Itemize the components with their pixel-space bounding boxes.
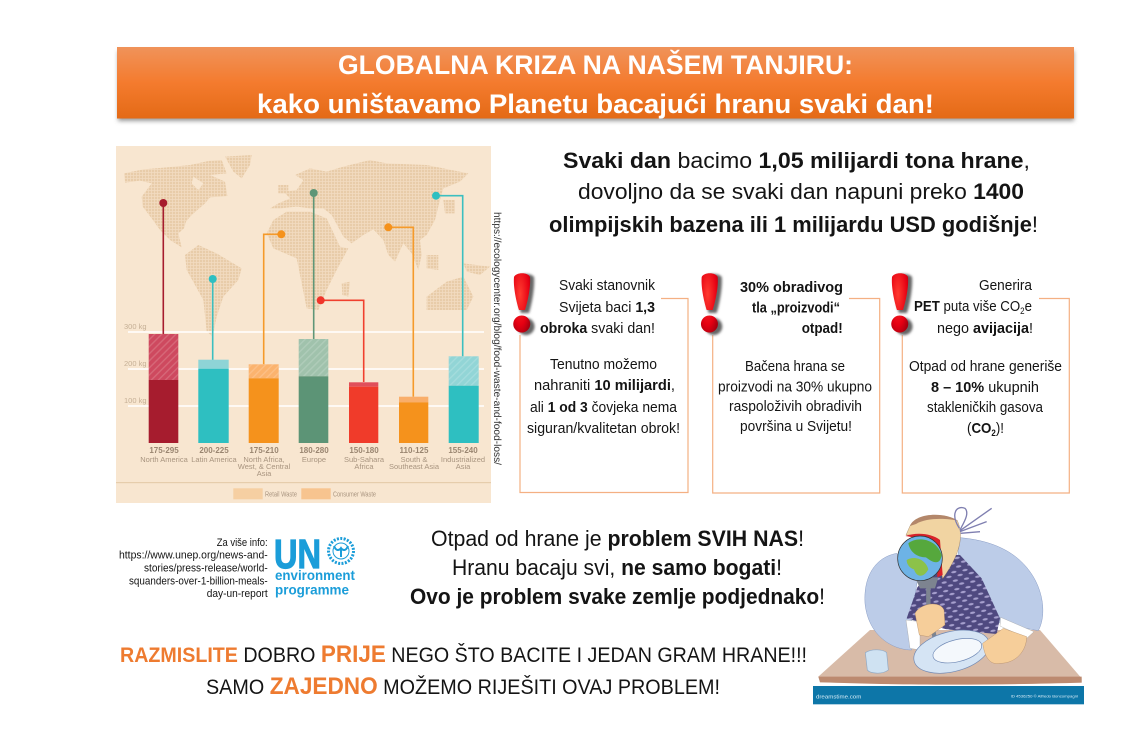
axis labels bbox=[124, 322, 147, 405]
card 2 body: proizvodi na 30% ukupno bbox=[718, 378, 872, 396]
bar category labels: 155-240 bbox=[448, 446, 478, 455]
call to action bbox=[120, 641, 807, 700]
bar category labels: Africa bbox=[354, 462, 374, 471]
more info text: Za više info: bbox=[217, 537, 268, 549]
head bbox=[905, 508, 992, 579]
chart legend: Consumer Waste bbox=[333, 490, 376, 498]
card 3 heading: nego avijacija! bbox=[937, 320, 1033, 337]
card 1 heading bbox=[540, 277, 655, 337]
icon: exclamation mark bbox=[701, 273, 722, 335]
card 2 heading: tla „proizvodi“ bbox=[752, 300, 840, 316]
hands, cuffs and plate bbox=[906, 604, 1034, 680]
bar category labels: 150-180 bbox=[349, 446, 379, 455]
card 3 body: stakleničkih gasova bbox=[927, 399, 1044, 416]
card 3 body: 8 – 10% ukupnih bbox=[931, 379, 1039, 396]
bar: Europe bbox=[299, 189, 328, 443]
UN environment programme logo bbox=[274, 531, 355, 598]
card 2 body: Bačena hrana se bbox=[745, 358, 845, 375]
source url, vertical: https://ecologycenter.org/blog/food-waste-and-food-loss/ bbox=[491, 212, 503, 465]
more info text: stories/press-release/world- bbox=[144, 562, 268, 574]
card 3 body: )! bbox=[996, 420, 1004, 437]
card 3 body: 2 bbox=[991, 428, 996, 438]
chart legend bbox=[116, 482, 491, 499]
more info text: squanders-over-1-billion-meals- bbox=[129, 576, 268, 588]
card 1 body: Tenutno možemo bbox=[550, 356, 657, 373]
icon: exclamation mark bbox=[891, 273, 913, 335]
title line 1: GLOBALNA KRIZA NA NAŠEM TANJIRU: bbox=[338, 49, 853, 80]
call to action: SAMO ZAJEDNO MOŽEMO RIJEŠITI OVAJ PROBLEM! bbox=[206, 673, 720, 700]
card 3 heading: PET puta više CO bbox=[914, 298, 1031, 315]
shoulders bbox=[865, 538, 1043, 650]
card 1: meals bbox=[513, 273, 688, 492]
bar category labels: South & bbox=[401, 455, 427, 464]
bar category labels: 180-280 bbox=[299, 446, 329, 455]
message: problem for everyone: Ovo je problem svake zemlje podjednako! bbox=[410, 584, 825, 609]
bar category labels: West, & Central bbox=[238, 462, 291, 471]
headline statistic text: dovoljno da se svaki dan napuni preko 1400 bbox=[578, 179, 1024, 204]
axis labels: 200 kg bbox=[124, 359, 147, 368]
chart legend: Retail Waste bbox=[265, 490, 297, 498]
card 1 heading: obroka svaki dan! bbox=[540, 320, 655, 337]
bar category labels: Industrialized bbox=[441, 455, 485, 464]
bar category labels: Europe bbox=[302, 455, 326, 464]
globe on fork bbox=[898, 536, 942, 640]
card 3: emissions bbox=[891, 273, 1069, 493]
card 2 body: površina u Svijetu! bbox=[740, 418, 852, 435]
bar category labels: North Africa, bbox=[243, 455, 285, 464]
headline statistic text: Svaki dan bacimo 1,05 milijardi tona hrane , bbox=[563, 148, 1030, 173]
bar category labels: 110-125 bbox=[400, 446, 429, 455]
card 2 heading: 30% obradivog bbox=[740, 279, 843, 296]
card 1 body: ali 1 od 3 čovjeka nema bbox=[530, 399, 678, 416]
more info text: https://www.unep.org/news-and- bbox=[119, 550, 268, 562]
card 1 heading: Svijeta baci 1,3 bbox=[559, 299, 655, 316]
bar category labels: North America bbox=[140, 455, 189, 464]
card 3 heading: 2 bbox=[1020, 306, 1025, 316]
icon: UN emblem bbox=[328, 538, 354, 564]
card 3 heading: e bbox=[1025, 298, 1032, 315]
call to action: RAZMISLITE DOBRO PRIJE NEGO ŠTO BACITE I JEDAN GRAM HRANE!!! bbox=[120, 641, 807, 668]
bar: North Africa, West and Central Asia bbox=[249, 230, 285, 443]
stock image bar: dreamstime.com bbox=[816, 695, 862, 701]
UN environment programme logo: programme bbox=[275, 582, 349, 598]
card 1 heading: Svaki stanovnik bbox=[559, 277, 655, 294]
panel: world map and food waste bar chart bbox=[116, 146, 491, 503]
bar category labels: Asia bbox=[257, 469, 272, 478]
bar category labels: Latin America bbox=[191, 455, 238, 464]
card 2 body: raspoloživih obradivih bbox=[729, 398, 862, 415]
bar: Industrialized Asia bbox=[432, 192, 479, 443]
bar: Latin America bbox=[198, 275, 229, 443]
UN environment programme logo: UN bbox=[274, 531, 321, 577]
message: problem for everyone: Otpad od hrane je problem SVIH NAS! bbox=[431, 526, 804, 551]
stock image bar: ID 4536250 © Alfredo Boncompagni bbox=[1011, 693, 1078, 698]
axis labels: 300 kg bbox=[124, 322, 147, 331]
card 2 body bbox=[718, 358, 872, 435]
card 3 body bbox=[909, 358, 1062, 438]
card 3 heading: Generira bbox=[979, 277, 1033, 294]
icon: exclamation mark bbox=[513, 273, 535, 335]
message: problem for everyone: Hranu bacaju svi, ne samo bogati! bbox=[452, 555, 782, 580]
bar category labels: 200-225 bbox=[199, 446, 229, 455]
message: problem for everyone bbox=[410, 526, 825, 609]
gridlines bbox=[128, 332, 484, 406]
illustration: man eating the globe bbox=[813, 508, 1084, 704]
bar category labels: Sub-Sahara bbox=[344, 455, 385, 464]
bar: North America bbox=[149, 199, 178, 443]
table bbox=[818, 630, 1082, 685]
UN environment programme logo: environment bbox=[275, 568, 355, 583]
bar category labels bbox=[140, 446, 485, 478]
bar category labels: Asia bbox=[456, 462, 471, 471]
dotted world map bbox=[124, 155, 490, 337]
card 2: land bbox=[701, 273, 880, 493]
bar: South and Southeast Asia bbox=[384, 223, 428, 443]
bar category labels: 175-295 bbox=[149, 446, 179, 455]
axis labels: 100 kg bbox=[124, 396, 147, 405]
checked shirt bbox=[907, 555, 1000, 634]
more info text bbox=[119, 537, 268, 600]
headline statistic text: olimpijskih bazena ili 1 milijardu USD godišnje! bbox=[549, 212, 1038, 237]
title banner bbox=[117, 47, 1074, 121]
more info text: day-un-report bbox=[207, 588, 268, 600]
card 2 heading bbox=[740, 279, 843, 337]
stock image bar bbox=[813, 686, 1084, 704]
water glass bbox=[865, 650, 888, 673]
headline statistic text bbox=[549, 148, 1038, 237]
card 1 body: nahraniti 10 milijardi, bbox=[534, 377, 675, 394]
title line 2: kako uništavamo Planetu bacajući hranu svaki dan! bbox=[257, 89, 934, 119]
card 1 body bbox=[527, 356, 680, 437]
card 3 heading bbox=[914, 277, 1033, 337]
bar category labels: 175-210 bbox=[249, 446, 279, 455]
card 3 body: (CO bbox=[967, 420, 994, 437]
bar: Sub-Sahara Africa bbox=[317, 296, 378, 443]
card 2 heading: otpad! bbox=[802, 320, 843, 337]
card 3 body: Otpad od hrane generiše bbox=[909, 358, 1062, 375]
card 1 body: siguran/kvalitetan obrok! bbox=[527, 420, 680, 437]
bar category labels: Southeast Asia bbox=[389, 462, 440, 471]
